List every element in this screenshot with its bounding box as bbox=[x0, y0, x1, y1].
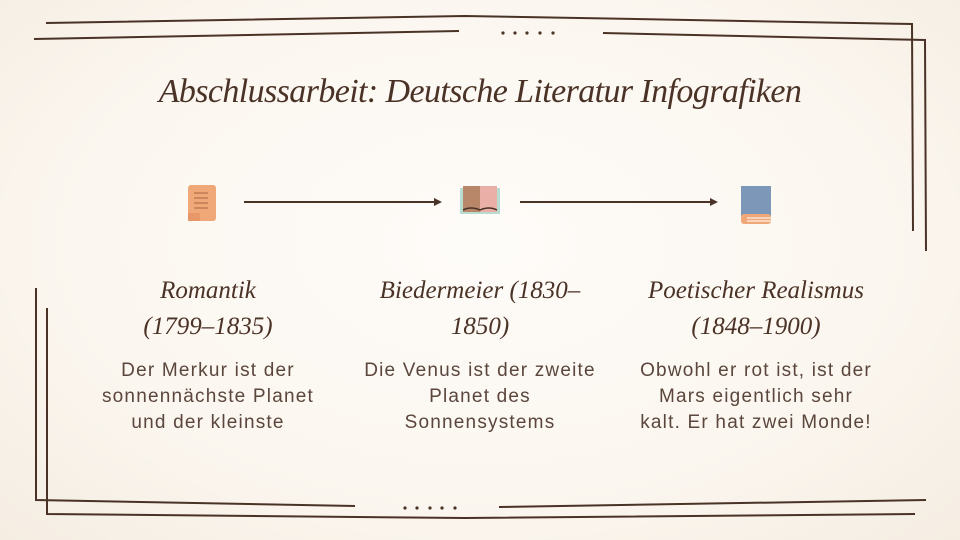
text: Die Venus ist der zweite bbox=[364, 360, 596, 381]
column: Biedermeier bbox=[364, 277, 596, 433]
text: sonnennächste Planet bbox=[102, 386, 314, 407]
heading: (1799–1835) bbox=[143, 313, 273, 340]
text bbox=[102, 360, 314, 433]
text: und der kleinste bbox=[131, 412, 285, 433]
icon: open book bbox=[460, 186, 500, 214]
arrow 1 bbox=[244, 198, 442, 206]
text bbox=[364, 360, 596, 433]
heading: (1848–1900) bbox=[691, 313, 821, 340]
heading bbox=[648, 277, 864, 340]
heading bbox=[143, 277, 273, 340]
column: Romantik bbox=[102, 277, 314, 433]
heading: Poetischer Realismus bbox=[648, 277, 864, 304]
title: Abschlussarbeit: Deutsche Literatur Infografiken bbox=[159, 73, 801, 110]
text: Der Merkur ist der bbox=[121, 360, 295, 381]
text: kalt. Er hat zwei Monde! bbox=[640, 412, 872, 433]
heading: Biedermeier (1830– bbox=[380, 277, 580, 304]
icon: scroll bbox=[188, 185, 216, 221]
text: Planet des bbox=[429, 386, 531, 407]
text: Obwohl er rot ist, ist der bbox=[640, 360, 872, 381]
heading bbox=[380, 277, 580, 340]
text: Mars eigentlich sehr bbox=[659, 386, 853, 407]
arrow 2 bbox=[520, 198, 718, 206]
text: Sonnensystems bbox=[405, 412, 555, 433]
column: Poetischer Realismus bbox=[640, 277, 872, 433]
heading: 1850) bbox=[451, 313, 509, 340]
heading: Romantik bbox=[160, 277, 256, 304]
text bbox=[640, 360, 872, 433]
icon: closed book bbox=[741, 186, 771, 224]
